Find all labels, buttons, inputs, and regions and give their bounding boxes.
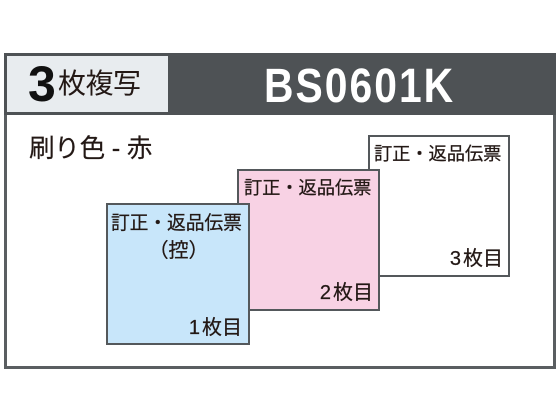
sheet 3 title: 訂正・返品伝票 xyxy=(374,143,501,164)
sheet 1: blue xyxy=(106,203,250,345)
sheet 1 number: 1枚目 xyxy=(189,317,242,339)
sheet 2 number: 2枚目 xyxy=(320,282,373,304)
badge text: 枚複写 xyxy=(58,68,141,99)
sheet 3: white xyxy=(368,135,510,277)
sheet 2 title: 訂正・返品伝票 xyxy=(244,177,371,198)
sheet 2: pink xyxy=(237,169,380,311)
model number heading: BS0601K xyxy=(264,60,455,113)
header bar xyxy=(4,53,556,115)
badge: 3 copies xyxy=(7,56,168,112)
sheet 1 title: 訂正・返品伝票 xyxy=(111,212,242,233)
sheet 1 subtitle: （控） xyxy=(149,240,208,262)
badge number: 3 xyxy=(28,56,56,112)
print colour label: 刷り色 - 赤 xyxy=(29,135,152,163)
outer frame panel xyxy=(4,53,556,369)
sheet 3 number: 3枚目 xyxy=(450,248,503,270)
